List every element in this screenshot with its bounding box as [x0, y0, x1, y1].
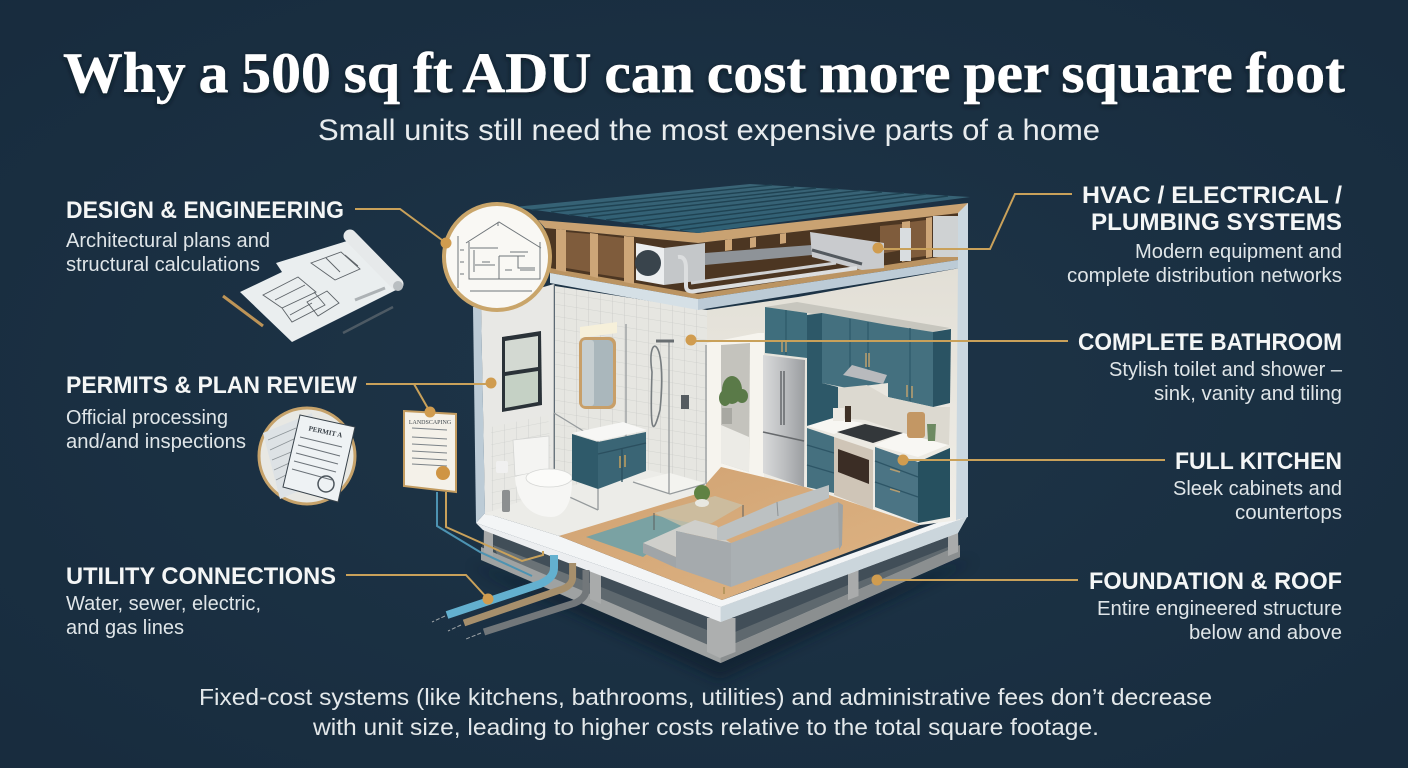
- label: complete bathroom: Stylish toilet and shower –: [1109, 359, 1343, 381]
- permit certificate: [404, 411, 456, 492]
- rug: [586, 515, 700, 557]
- label: full kitchen: countertops: [1235, 502, 1342, 524]
- upper cabinets: [765, 302, 951, 426]
- label: design and engineering: structural calculations: [66, 254, 260, 276]
- label: permits and plan review: and/and inspections: [66, 431, 246, 453]
- subtitle: Small units still need the most expensive parts of a home: [318, 114, 1100, 147]
- label: foundation and roof: [1089, 568, 1342, 644]
- right wall: [956, 203, 968, 520]
- label: permits and plan review: [66, 372, 357, 453]
- toilet: [496, 436, 572, 517]
- title: Why a 500 sq ft ADU can cost more per square foot: [63, 42, 1345, 105]
- label: permits and plan review: PERMITS & PLAN REVIEW: [66, 372, 357, 399]
- pencil: [223, 296, 263, 326]
- label: hvac electrical plumbing: Modern equipment and: [1135, 241, 1342, 263]
- range hood: [843, 365, 887, 384]
- lower right cabinets: [874, 433, 950, 523]
- bathroom floor: [485, 468, 706, 536]
- house cutaway illustration: [432, 184, 970, 663]
- blueprints: [223, 236, 403, 342]
- label: foundation and roof: Entire engineered structure: [1097, 598, 1342, 620]
- label: permits and plan review: Official processing: [66, 407, 228, 429]
- permit documents circle: [259, 408, 355, 504]
- label: full kitchen: [1173, 448, 1342, 524]
- label: design and engineering: Architectural plans and: [66, 230, 270, 252]
- studs: [566, 220, 926, 278]
- label: design and engineering: [66, 197, 344, 276]
- HVAC equipment: [635, 228, 911, 291]
- leader dots: [424, 238, 908, 604]
- fridge: [763, 355, 805, 487]
- left wall with window: [473, 284, 554, 523]
- floor slab: [476, 513, 967, 622]
- magnifier: building section drawing: [444, 204, 550, 310]
- vanity: [572, 422, 647, 489]
- conduit lines from permit to foundation: [437, 492, 543, 576]
- leader lines: [346, 194, 1165, 599]
- label: hvac electrical plumbing: HVAC / ELECTRICAL /: [1082, 182, 1342, 209]
- footer note: with unit size, leading to higher costs relative to the total square footage.: [312, 714, 1099, 740]
- label: hvac electrical plumbing: complete distribution networks: [1067, 265, 1342, 287]
- pen: [343, 307, 393, 333]
- label: utility connections: UTILITY CONNECTIONS: [66, 563, 336, 590]
- label: complete bathroom: sink, vanity and tiling: [1154, 383, 1342, 405]
- footer note: [199, 684, 1212, 740]
- door opening: [707, 333, 764, 490]
- utility pipes: [432, 555, 586, 639]
- label: design and engineering: DESIGN & ENGINEERING: [66, 197, 344, 224]
- shower: [554, 324, 706, 510]
- label: foundation and roof: FOUNDATION & ROOF: [1089, 568, 1342, 595]
- wainscot tiles: [491, 415, 560, 520]
- label: full kitchen: Sleek cabinets and: [1173, 478, 1342, 500]
- vanity light: [580, 322, 617, 338]
- lower left cabinets: [807, 418, 863, 493]
- label: hvac electrical plumbing: PLUMBING SYSTEMS: [1091, 209, 1342, 236]
- wood floor: [559, 467, 920, 600]
- attic cavity: [545, 213, 960, 310]
- label: hvac electrical plumbing: [1067, 182, 1342, 287]
- kitchen back wall: [707, 268, 960, 525]
- sofa: [643, 485, 843, 594]
- label: utility connections: and gas lines: [66, 617, 184, 639]
- section lines: [458, 222, 541, 291]
- label: utility connections: Water, sewer, electric,: [66, 593, 261, 615]
- backsplash: [838, 385, 950, 445]
- label: foundation and roof: below and above: [1189, 622, 1342, 644]
- coffee table: [654, 485, 743, 530]
- mirror: [579, 337, 616, 409]
- stove: [834, 424, 903, 510]
- label: complete bathroom: [1078, 329, 1343, 405]
- bathroom tile wall: [555, 286, 707, 520]
- label: full kitchen: FULL KITCHEN: [1175, 448, 1342, 475]
- cutting board and utensils: [833, 406, 936, 441]
- label: complete bathroom: COMPLETE BATHROOM: [1078, 329, 1342, 356]
- label: utility connections: [66, 563, 336, 639]
- roof: [514, 184, 970, 243]
- window: [502, 331, 542, 412]
- plant: [719, 376, 748, 406]
- ground shadow: [470, 560, 975, 680]
- permit documents circle: PERMIT A: [308, 425, 343, 440]
- foundation: [481, 528, 960, 663]
- permit certificate: LANDSCAPING: [409, 420, 452, 426]
- footer note: Fixed-cost systems (like kitchens, bathrooms, utilities) and administrative fees don’t decrease: [199, 684, 1212, 710]
